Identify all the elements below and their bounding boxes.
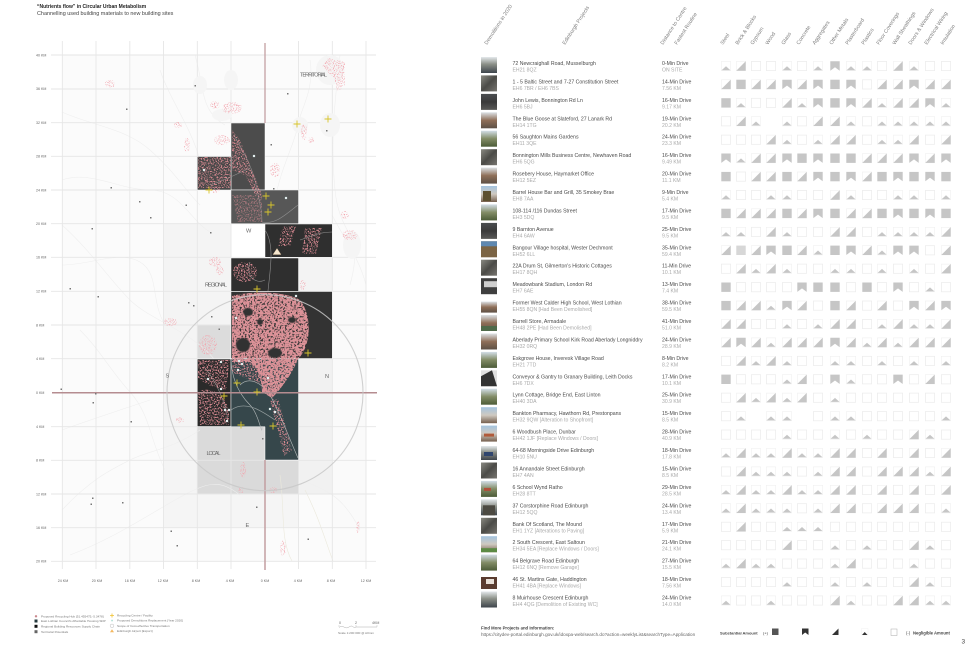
project row 28: 27-Min Drive: [662, 559, 692, 565]
project row 20: 8.5 KM: [662, 418, 678, 424]
matrix row 5: [721, 135, 951, 144]
matrix row 10: [721, 227, 951, 237]
map legend: Edinburgh Airport [Export]: [117, 629, 153, 633]
column headers: materials: Steel: [720, 33, 731, 46]
project row 14: EH55 8QN [Had Been Demolished]: [512, 307, 593, 313]
project row 8: 9-Min Drive: [662, 190, 689, 196]
project row 7: Rosebery House, Haymarket Office: [512, 172, 594, 178]
bottom axis labels: 20 KM: [92, 579, 102, 583]
column headers: materials: Gypsum: [750, 26, 766, 46]
project row 6: 9.49 KM: [662, 160, 681, 166]
project row 15: EH48 2PE [Had Been Demolished]: [512, 326, 592, 332]
matrix row 28: [721, 559, 951, 568]
matrix row 13: [721, 282, 951, 292]
project row 25: 13.4 KM: [662, 510, 681, 516]
column headers: projects: Demolitions in 2020: [484, 4, 514, 46]
supply chain dark cells: [197, 123, 332, 460]
project row 15: 41-Min Drive: [662, 319, 692, 325]
project row 10: 25-Min Drive: [662, 227, 692, 233]
project row 15: [481, 315, 692, 332]
project row 8: Barrel House Bar and Grill, 35 Smokey Brae: [512, 190, 614, 196]
project row 11: 59.4 KM: [662, 252, 681, 258]
matrix row 1: [721, 61, 951, 71]
red axes: [52, 43, 377, 570]
project row 26: 17-Min Drive: [662, 522, 692, 528]
column headers: materials: Wall Sheathings: [892, 11, 918, 46]
matrix row 4: [721, 117, 951, 126]
map zone labels: N: [325, 374, 329, 380]
project row 24: [481, 481, 692, 497]
left axis labels: 28 KM: [36, 155, 46, 159]
project row 19: [481, 389, 692, 405]
project row 26: [481, 518, 692, 534]
map zone labels: W: [246, 228, 252, 234]
left axis labels: 0 KM: [36, 391, 44, 395]
matrix row 2: [721, 80, 951, 89]
matrix row 26: [721, 522, 951, 532]
project row 19: 25-Min Drive: [662, 393, 692, 399]
column headers: materials: Plasterboard: [845, 18, 866, 46]
demolition site markers: [203, 155, 297, 422]
project row 2: [481, 75, 692, 92]
matrix row 17: [721, 356, 951, 366]
project row 17: 8.2 KM: [662, 362, 678, 368]
project row 27: 21-Min Drive: [662, 540, 692, 546]
column headers: materials: Concrete: [796, 25, 812, 46]
project row 18: 10.1 KM: [662, 381, 681, 387]
project row 7: [481, 168, 692, 184]
project row 28: EH12 6NQ [Remove Garage]: [512, 565, 579, 571]
matrix legend: (+): [763, 630, 769, 636]
matrix row 15: [721, 319, 951, 329]
project row 6: 16-Min Drive: [662, 153, 692, 159]
project row 12: 22A Drum St, Gilmerton's Historic Cottages: [512, 264, 612, 270]
map legend: Scope of Cost-effective Transportation: [117, 624, 170, 628]
map zone labels: [166, 72, 329, 529]
project row 8: [481, 186, 689, 202]
project row 2: EH6 7BR / EH6 7BS: [512, 86, 560, 92]
project row 30: [481, 592, 692, 608]
faint road network: [62, 55, 366, 561]
matrix row 12: [721, 264, 951, 273]
project row 16: Aberlady Primary School Kirk Road Aberlady Longniddry: [512, 338, 643, 344]
left axis labels: 40 KM: [36, 54, 46, 58]
project row 20: Bankton Pharmacy, Hawthorn Rd, Prestonpans: [512, 411, 622, 417]
project row 23: 8.5 KM: [662, 473, 678, 479]
bottom axis labels: 4 KM: [226, 579, 234, 583]
project row 10: 9 Barnton Avenue: [512, 227, 554, 233]
project row 22: 64-68 Morningside Drive Edinburgh: [512, 448, 594, 454]
project row 6: [481, 149, 692, 166]
matrix legend: [720, 628, 950, 636]
project row 5: 56 Saughton Mains Gardens: [512, 135, 579, 141]
left axis labels: 24 KM: [36, 188, 46, 192]
column headers: projects: Distance to Centre: [660, 6, 689, 46]
project row 2: 1 - 5 Baltic Street and 7-27 Constitution Street: [512, 79, 619, 85]
matrix row 23: [721, 467, 951, 476]
project row 7: 20-Min Drive: [662, 172, 692, 178]
scale bar: [338, 621, 379, 635]
project row 12: [481, 260, 691, 276]
project row 28: 64 Belgrave Road Edinburgh: [512, 559, 579, 565]
scale bar: Scale 1:200 000 @ A0mm: [338, 631, 374, 635]
column headers: materials: Glass: [781, 31, 793, 46]
project row 8: EH8 7AA: [512, 196, 534, 202]
project row 10: EH4 6AW: [512, 233, 535, 239]
project row 10: [481, 223, 692, 239]
project row 26: 5.9 KM: [662, 528, 678, 534]
project row 3: [481, 94, 692, 110]
project row 9: 17-Min Drive: [662, 208, 692, 214]
project row 7: EH12 5EZ: [512, 178, 536, 184]
project row 19: EH40 3DA: [512, 399, 537, 405]
column headers: projects: [484, 4, 699, 46]
matrix row 16: [721, 338, 951, 347]
left axis labels: [36, 54, 46, 564]
project row 5: [481, 131, 692, 147]
project row 12: 10.1 KM: [662, 270, 681, 276]
column headers: projects: Fastest Routine: [674, 12, 699, 46]
project row 28: 15.5 KM: [662, 565, 681, 571]
map zone labels: TERRITORIAL: [300, 72, 327, 78]
project row 11: Bangour Village hospital, Wester Dechmont: [512, 245, 613, 251]
project row 23: [481, 462, 692, 479]
project row 8: 5.4 KM: [662, 196, 678, 202]
project row 24: 29-Min Drive: [662, 485, 692, 491]
project row 20: EH32 9QW [Alteration to Shopfront]: [512, 418, 594, 424]
project row 7: 11.1 KM: [662, 178, 681, 184]
left axis labels: 32 KM: [36, 121, 46, 125]
project row 23: EH7 4AN: [512, 473, 534, 479]
project row 16: [481, 334, 692, 350]
project row 21: 40.9 KM: [662, 436, 681, 442]
project row 18: [481, 370, 692, 387]
project row 12: 11-Min Drive: [662, 264, 691, 270]
pink urban core: [232, 293, 309, 398]
project row 30: 8 Muirhouse Crescent Edinburgh: [512, 596, 588, 602]
matrix row 8: [721, 190, 951, 200]
title block: [37, 4, 174, 17]
project row 1: EH21 8QZ: [512, 68, 537, 74]
project row 29: EH41 4BA [Replace Windows]: [512, 584, 582, 590]
left axis labels: 36 KM: [36, 87, 46, 91]
page number: 3: [962, 638, 966, 646]
project row 29: 46 St. Martins Gate, Haddington: [512, 577, 587, 583]
matrix row 14: [721, 301, 951, 310]
project row 24: 6 School Wynd Ratho: [512, 485, 563, 491]
project row 29: 18-Min Drive: [662, 577, 692, 583]
left axis labels: 4 KM: [36, 425, 44, 429]
matrix row 25: [721, 504, 951, 513]
title block: Channelling used building materials to new building sites: [37, 11, 174, 17]
project row 12: EH17 8QH: [512, 270, 537, 276]
project row 4: 20.2 KM: [662, 123, 681, 129]
project row 23: 15-Min Drive: [662, 466, 692, 472]
project row 11: 35-Min Drive: [662, 245, 692, 251]
project row 30: 24-Min Drive: [662, 596, 692, 602]
project row 25: 37 Corstorphine Road Edinburgh: [512, 503, 588, 509]
project row 20: 15-Min Drive: [662, 411, 692, 417]
footer: more projects link: [481, 626, 696, 637]
column headers: materials: Other Metals: [829, 17, 850, 46]
project row 30: EH4 4QG [Demolition of Existing WC]: [512, 602, 598, 608]
column headers: materials: Wood: [765, 31, 777, 46]
matrix row 3: [721, 98, 951, 108]
footer: more projects link: Find More Projects and Information:: [481, 626, 555, 630]
dark gaps in urban fabric: [236, 308, 296, 358]
project row 24: 28.5 KM: [662, 491, 681, 497]
project row 3: John Lewis, Bonnington Rd Ln: [512, 98, 583, 104]
scale bar: 0: [339, 621, 341, 625]
project row 24: EH28 8TT: [512, 491, 536, 497]
matrix legend: (-): [906, 630, 911, 636]
project row 11: [481, 241, 692, 258]
project row 9: EH3 5DQ: [512, 215, 534, 221]
left axis labels: 20 KM: [36, 222, 46, 226]
left axis labels: 20 KM: [36, 560, 46, 564]
left axis labels: 8 KM: [36, 459, 44, 463]
Edinburgh airport marker: [273, 248, 281, 254]
map panel: circular metabolism grid map: [36, 41, 377, 583]
left axis labels: 16 KM: [36, 256, 46, 260]
project row 1: 0-Min Drive: [662, 61, 689, 67]
project row 22: 18-Min Drive: [662, 448, 692, 454]
project row 21: 28-Min Drive: [662, 430, 692, 436]
project row 30: 14.0 KM: [662, 602, 681, 608]
project row 16: 28.9 KM: [662, 344, 681, 350]
map zone labels: LOCAL: [206, 451, 220, 457]
project row 27: [481, 536, 692, 553]
project row 1: 72 Newcraighall Road, Musselburgh: [512, 61, 596, 67]
title block: “Nutrients flow” in Circular Urban Metabolism: [37, 4, 147, 10]
project row 16: EH32 0RQ: [512, 344, 537, 350]
bottom axis labels: 12 KM: [361, 579, 371, 583]
project row 11: EH52 6LL: [512, 252, 535, 258]
pale town footprints: [193, 55, 361, 259]
column headers: materials: Doors & Windows: [908, 7, 936, 46]
matrix row 9: [721, 209, 951, 218]
column headers: materials: Plastics: [861, 27, 876, 46]
map legend: Regional Building Resources Supply Chain: [41, 624, 100, 628]
project row 25: 24-Min Drive: [662, 503, 692, 509]
matrix row 24: [721, 485, 951, 495]
map legend: Recycling Centre / Facility: [117, 614, 153, 618]
bottom axis labels: 0 KM: [261, 579, 269, 583]
bottom axis labels: 24 KM: [58, 579, 68, 583]
bottom axis labels: 4 KM: [294, 579, 302, 583]
pink recycling hubs outside core: [105, 58, 360, 556]
project row 10: 9.5 KM: [662, 233, 678, 239]
column headers: materials: Floor Coverings: [876, 11, 901, 46]
project row 9: [481, 204, 692, 221]
project row 4: The Blue Goose at Slateford, 27 Lanark Rd: [512, 116, 612, 122]
project row 5: 23.3 KM: [662, 141, 681, 147]
matrix row 21: [721, 430, 951, 439]
circle: scope of EV transportation: [167, 295, 363, 491]
map zone labels: S: [166, 374, 170, 380]
project row 25: [481, 499, 692, 516]
pink speckle in dark cells: [198, 130, 322, 456]
project row 23: 16 Annandale Street Edinburgh: [512, 466, 585, 472]
column headers: projects: Edinburgh Projects: [562, 5, 591, 46]
bottom axis labels: 8 KM: [327, 579, 335, 583]
project row 21: EH42 1JF [Replace Windows / Doors]: [512, 436, 599, 442]
project row 14: 38-Min Drive: [662, 301, 692, 307]
project row 17: 8-Min Drive: [662, 356, 689, 362]
column headers: materials: [720, 7, 957, 46]
project row 17: [481, 352, 689, 368]
roads in dark cells: [205, 135, 332, 458]
project row 9: 108-114 /116 Dundas Street: [512, 208, 577, 214]
matrix row 6: [721, 154, 951, 163]
map zone labels: E: [246, 523, 250, 529]
project row 16: 24-Min Drive: [662, 338, 692, 344]
matrix row 7: [721, 172, 951, 181]
project row 29: [481, 577, 692, 590]
bottom axis labels: 8 KM: [192, 579, 200, 583]
project row 14: [481, 301, 692, 313]
project row 14: Former West Calder High School, West Lothian: [512, 301, 622, 307]
project row 6: EH6 5QG: [512, 160, 535, 166]
project row 19: Lynn Cottage, Bridge End, East Linton: [512, 393, 601, 399]
project row 3: 16-Min Drive: [662, 98, 692, 104]
project row 2: 14-Min Drive: [662, 79, 692, 85]
project row 22: EH10 5NU: [512, 454, 537, 460]
project row 6: Bonnington Mills Business Centre, Newhaven Road: [512, 153, 631, 159]
project row 1: ON SITE: [662, 68, 683, 74]
map legend: East Lothian Council's Affordable Housing SDP: [41, 619, 106, 623]
project row 28: [481, 555, 692, 571]
matrix row 11: [721, 246, 951, 255]
regional and territorial shaded cells: [164, 224, 366, 528]
project row 18: 17-Min Drive: [662, 374, 692, 380]
project row 4: 19-Min Drive: [662, 116, 692, 122]
matrix legend: Negligible Amount: [913, 630, 950, 636]
bottom axis labels: [58, 579, 371, 583]
matrix row 27: [721, 540, 951, 550]
matrix row 19: [721, 393, 951, 402]
project row 4: EH14 1TG: [512, 123, 537, 129]
project row 15: 51.0 KM: [662, 326, 681, 332]
project row 2: 7.56 KM: [662, 86, 681, 92]
project row 19: 30.9 KM: [662, 399, 681, 405]
scale bar: 4KM: [372, 621, 379, 625]
project row 9: 9.5 KM: [662, 215, 678, 221]
column headers: materials: Aggregates: [812, 20, 832, 46]
project row 4: [481, 112, 692, 129]
column headers: materials: Electrical Wiring: [924, 11, 949, 46]
project row 13: [481, 278, 692, 295]
project row 13: Meadowbank Stadium, London Rd: [512, 282, 592, 288]
left axis labels: 12 KM: [36, 290, 46, 294]
matrix row 18: [721, 375, 951, 384]
left axis labels: 16 KM: [36, 526, 46, 530]
project row 1: [481, 57, 689, 74]
project row 5: EH11 3QE: [512, 141, 537, 147]
map legend: [34, 614, 183, 634]
left axis labels: 8 KM: [36, 323, 44, 327]
project row 13: 13-Min Drive: [662, 282, 692, 288]
footer: more projects link: https://citydev-portal.edinburgh.gov.uk/idoxpa-web/search.do?action=weeklyList&searchType=Application: [481, 632, 696, 637]
project row 21: [481, 426, 692, 442]
project row 5: 24-Min Drive: [662, 135, 692, 141]
left axis labels: 12 KM: [36, 492, 46, 496]
project row 20: [481, 407, 692, 424]
project row 27: 24.1 KM: [662, 547, 681, 553]
project row 27: 2 South Crescent, East Saltoun: [512, 540, 585, 546]
project row 29: 7.56 KM: [662, 584, 681, 590]
column headers: materials: Insulation: [940, 24, 957, 46]
project row 3: 9.17 KM: [662, 104, 681, 110]
scale bar: 2: [355, 621, 357, 625]
project row 17: Eskgrove House, Inveresk Village Road: [512, 356, 604, 362]
scattered demolition points: [60, 85, 328, 546]
panel: project list: [481, 57, 692, 608]
bottom axis labels: 12 KM: [158, 579, 168, 583]
project row 26: Bank Of Scotland, The Mound: [512, 522, 582, 528]
matrix legend: Substantial Amount: [720, 630, 758, 636]
project row 15: Barrell Store, Armadale: [512, 319, 566, 325]
matrix row 22: [721, 448, 951, 458]
map zone labels: REGIONAL: [205, 282, 227, 288]
project row 3: EH6 5BJ: [512, 104, 533, 110]
project row 27: EH34 5EA [Replace Windows / Doors]: [512, 547, 599, 553]
bottom axis labels: 16 KM: [125, 579, 135, 583]
project row 14: 59.5 KM: [662, 307, 681, 313]
project row 13: EH7 6AE: [512, 289, 534, 295]
map legend: Proposed Recycling Hub [51.455475,-5.3478]: [41, 614, 104, 618]
grid lines: [51, 41, 376, 569]
project row 18: EH6 7DX: [512, 381, 534, 387]
project row 22: 17.8 KM: [662, 454, 681, 460]
panel: materials matrix: [721, 61, 951, 605]
project row 13: 7.4 KM: [662, 289, 678, 295]
matrix row 20: [721, 412, 951, 421]
recycling centres: [206, 116, 332, 430]
project row 26: EH1 1YZ [Alterations to Paving]: [512, 528, 585, 534]
project row 25: EH12 5QQ: [512, 510, 537, 516]
matrix row 29: [721, 577, 951, 587]
project row 21: 6 Woodbush Place, Dunbar: [512, 430, 576, 436]
project row 18: Conveyor & Gantry to Granary Building, Leith Docks: [512, 374, 633, 380]
project row 22: [481, 446, 692, 460]
map legend: Territorial Potentials: [41, 630, 69, 634]
matrix row 30: [721, 596, 951, 605]
map legend: Proposed Demolitions Replacement [Year 2020]: [117, 619, 183, 623]
project row 17: EH21 7TD: [512, 362, 537, 368]
column headers: materials: Brick & Blocks: [735, 14, 758, 46]
left axis labels: 4 KM: [36, 357, 44, 361]
